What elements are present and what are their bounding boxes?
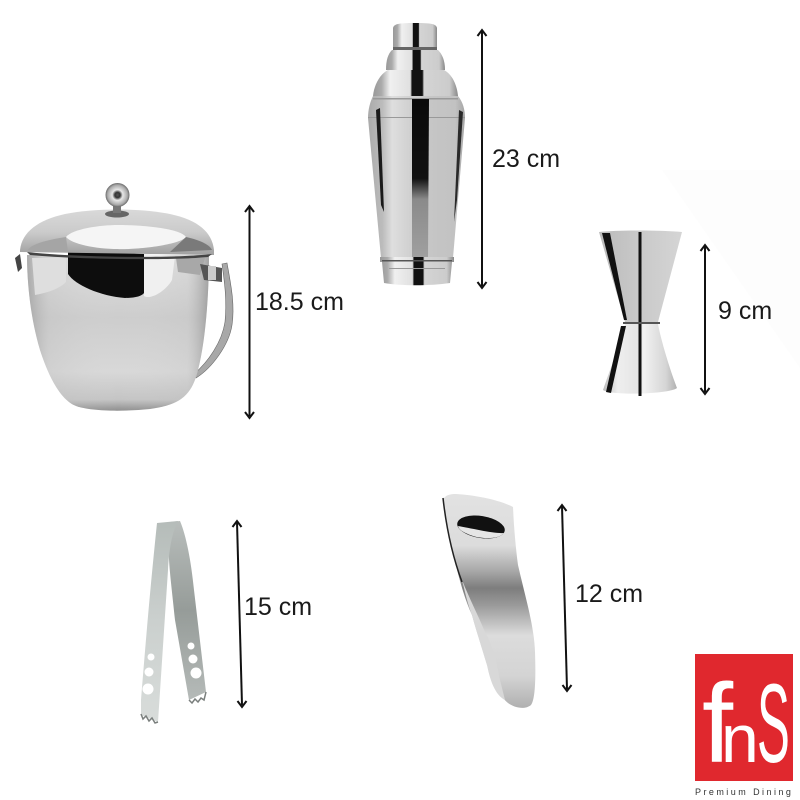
jigger upper cone — [599, 230, 682, 322]
logo red square — [695, 654, 793, 781]
arrow: bucket height — [245, 206, 254, 418]
logo — [695, 654, 793, 797]
bottle opener — [443, 494, 535, 708]
jigger lower cone — [603, 324, 677, 394]
shaker tier 2 — [386, 50, 445, 70]
shaker side stripes — [376, 108, 384, 212]
shaker shoulder — [368, 96, 465, 118]
arrow: shaker height — [478, 30, 486, 288]
jigger — [599, 230, 682, 396]
logo letter n: n — [721, 701, 759, 777]
ice bucket — [15, 183, 233, 411]
label: 23 cm: 23 cm — [492, 145, 560, 173]
shaker base — [380, 257, 454, 285]
arrow: tongs height — [232, 521, 246, 707]
tongs teeth — [141, 714, 158, 723]
bucket knob — [105, 210, 129, 218]
shaker centre stripe — [412, 99, 429, 258]
shaker body — [368, 118, 465, 258]
arrow: jigger height — [700, 245, 710, 394]
label: 15 cm: 15 cm — [244, 593, 312, 621]
tongs right arm — [169, 521, 206, 700]
label: 18.5 cm: 18.5 cm — [255, 288, 344, 316]
tongs holes — [148, 654, 154, 660]
logo tagline: Premium Dining — [695, 787, 793, 797]
bucket lid — [20, 210, 214, 255]
opener hole — [456, 512, 506, 542]
bucket body — [27, 255, 209, 411]
tongs left arm — [141, 521, 178, 722]
ice tongs — [141, 521, 206, 723]
opener blade — [443, 494, 535, 708]
label: 9 cm: 9 cm — [718, 297, 772, 325]
bucket dark reflection — [68, 250, 144, 298]
cocktail shaker — [368, 23, 465, 285]
bucket hinge — [200, 264, 222, 282]
shaker tier 3 — [373, 70, 458, 96]
opener left edge — [462, 580, 505, 700]
shaker cap — [393, 23, 437, 48]
logo letter f: f — [702, 661, 734, 786]
logo letter S: S — [757, 662, 790, 787]
bucket handle — [194, 263, 233, 378]
label: 12 cm: 12 cm — [575, 580, 643, 608]
bucket left lug — [15, 254, 22, 272]
arrow: opener height — [558, 505, 572, 691]
